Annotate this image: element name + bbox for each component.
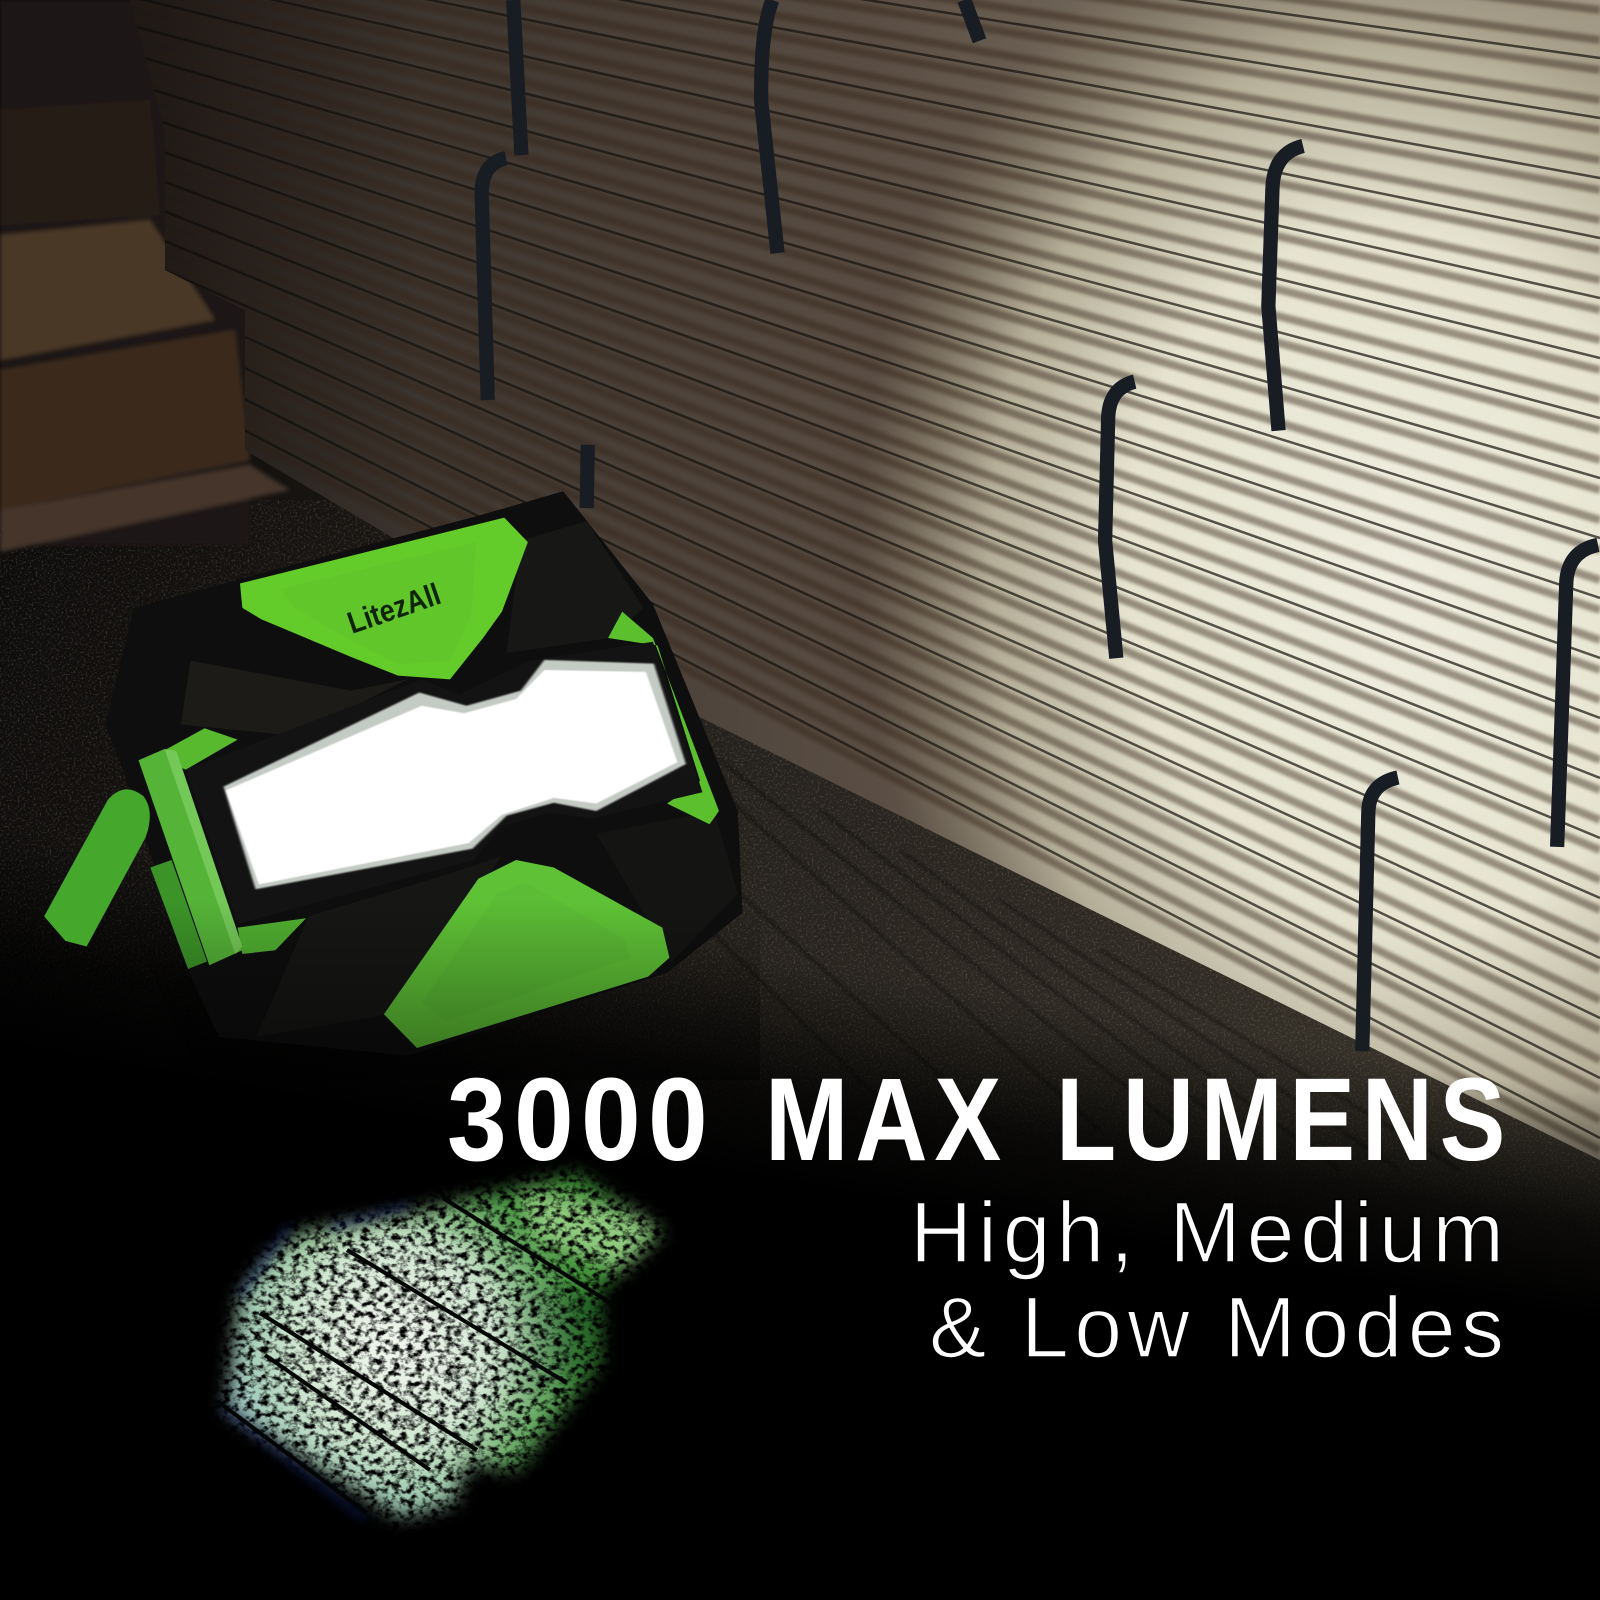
bottom green panel: [384, 860, 669, 1048]
headline: 3000: [447, 1054, 715, 1186]
blue fringe: [222, 1205, 410, 1520]
darkness gradient: [0, 700, 1600, 1600]
subheading line 1: High, Medium: [910, 1185, 1504, 1281]
logo: LitezAll: [343, 576, 445, 641]
headline: MAX: [765, 1054, 1008, 1186]
left background boards: [0, 0, 290, 552]
plank seams on patch: [220, 1198, 617, 1513]
kickstand leg: [44, 789, 150, 946]
textured upper right housing: [507, 521, 643, 653]
right green strip: [608, 612, 719, 824]
light glow rim: [223, 660, 686, 889]
green top panel: [240, 518, 528, 679]
green frame: [139, 749, 242, 965]
work light: [44, 491, 760, 1080]
subheading line 2: & Low Modes: [929, 1280, 1504, 1376]
light emitting panel: [226, 670, 677, 884]
frame highlight: [164, 749, 242, 954]
headline: LUMENS: [1056, 1054, 1512, 1186]
bottom panel inset: [422, 883, 629, 1022]
top panel inset: [280, 542, 476, 664]
ribbed upper left texture: [181, 661, 408, 736]
lumber stack: [130, 0, 1600, 1160]
plank seam lines: [0, 0, 1600, 1138]
black packing straps: [482, 0, 1598, 1051]
lamp body and green panels: [44, 491, 743, 1056]
plank grooves: [302, 0, 1600, 1154]
patch texture: [200, 1160, 680, 1530]
ribbed lower texture: [257, 856, 502, 1037]
lit patch on floor: [200, 1160, 680, 1530]
lower frame tab: [238, 918, 306, 954]
lamp lower shading: [110, 860, 760, 1080]
light panel: [186, 642, 702, 924]
subheading: [910, 1185, 1504, 1376]
lower right housing: [596, 811, 738, 962]
left shoulder green: [167, 728, 238, 770]
panel frame: [186, 642, 702, 924]
black housing: [106, 491, 743, 1056]
rear leg: [150, 860, 207, 969]
